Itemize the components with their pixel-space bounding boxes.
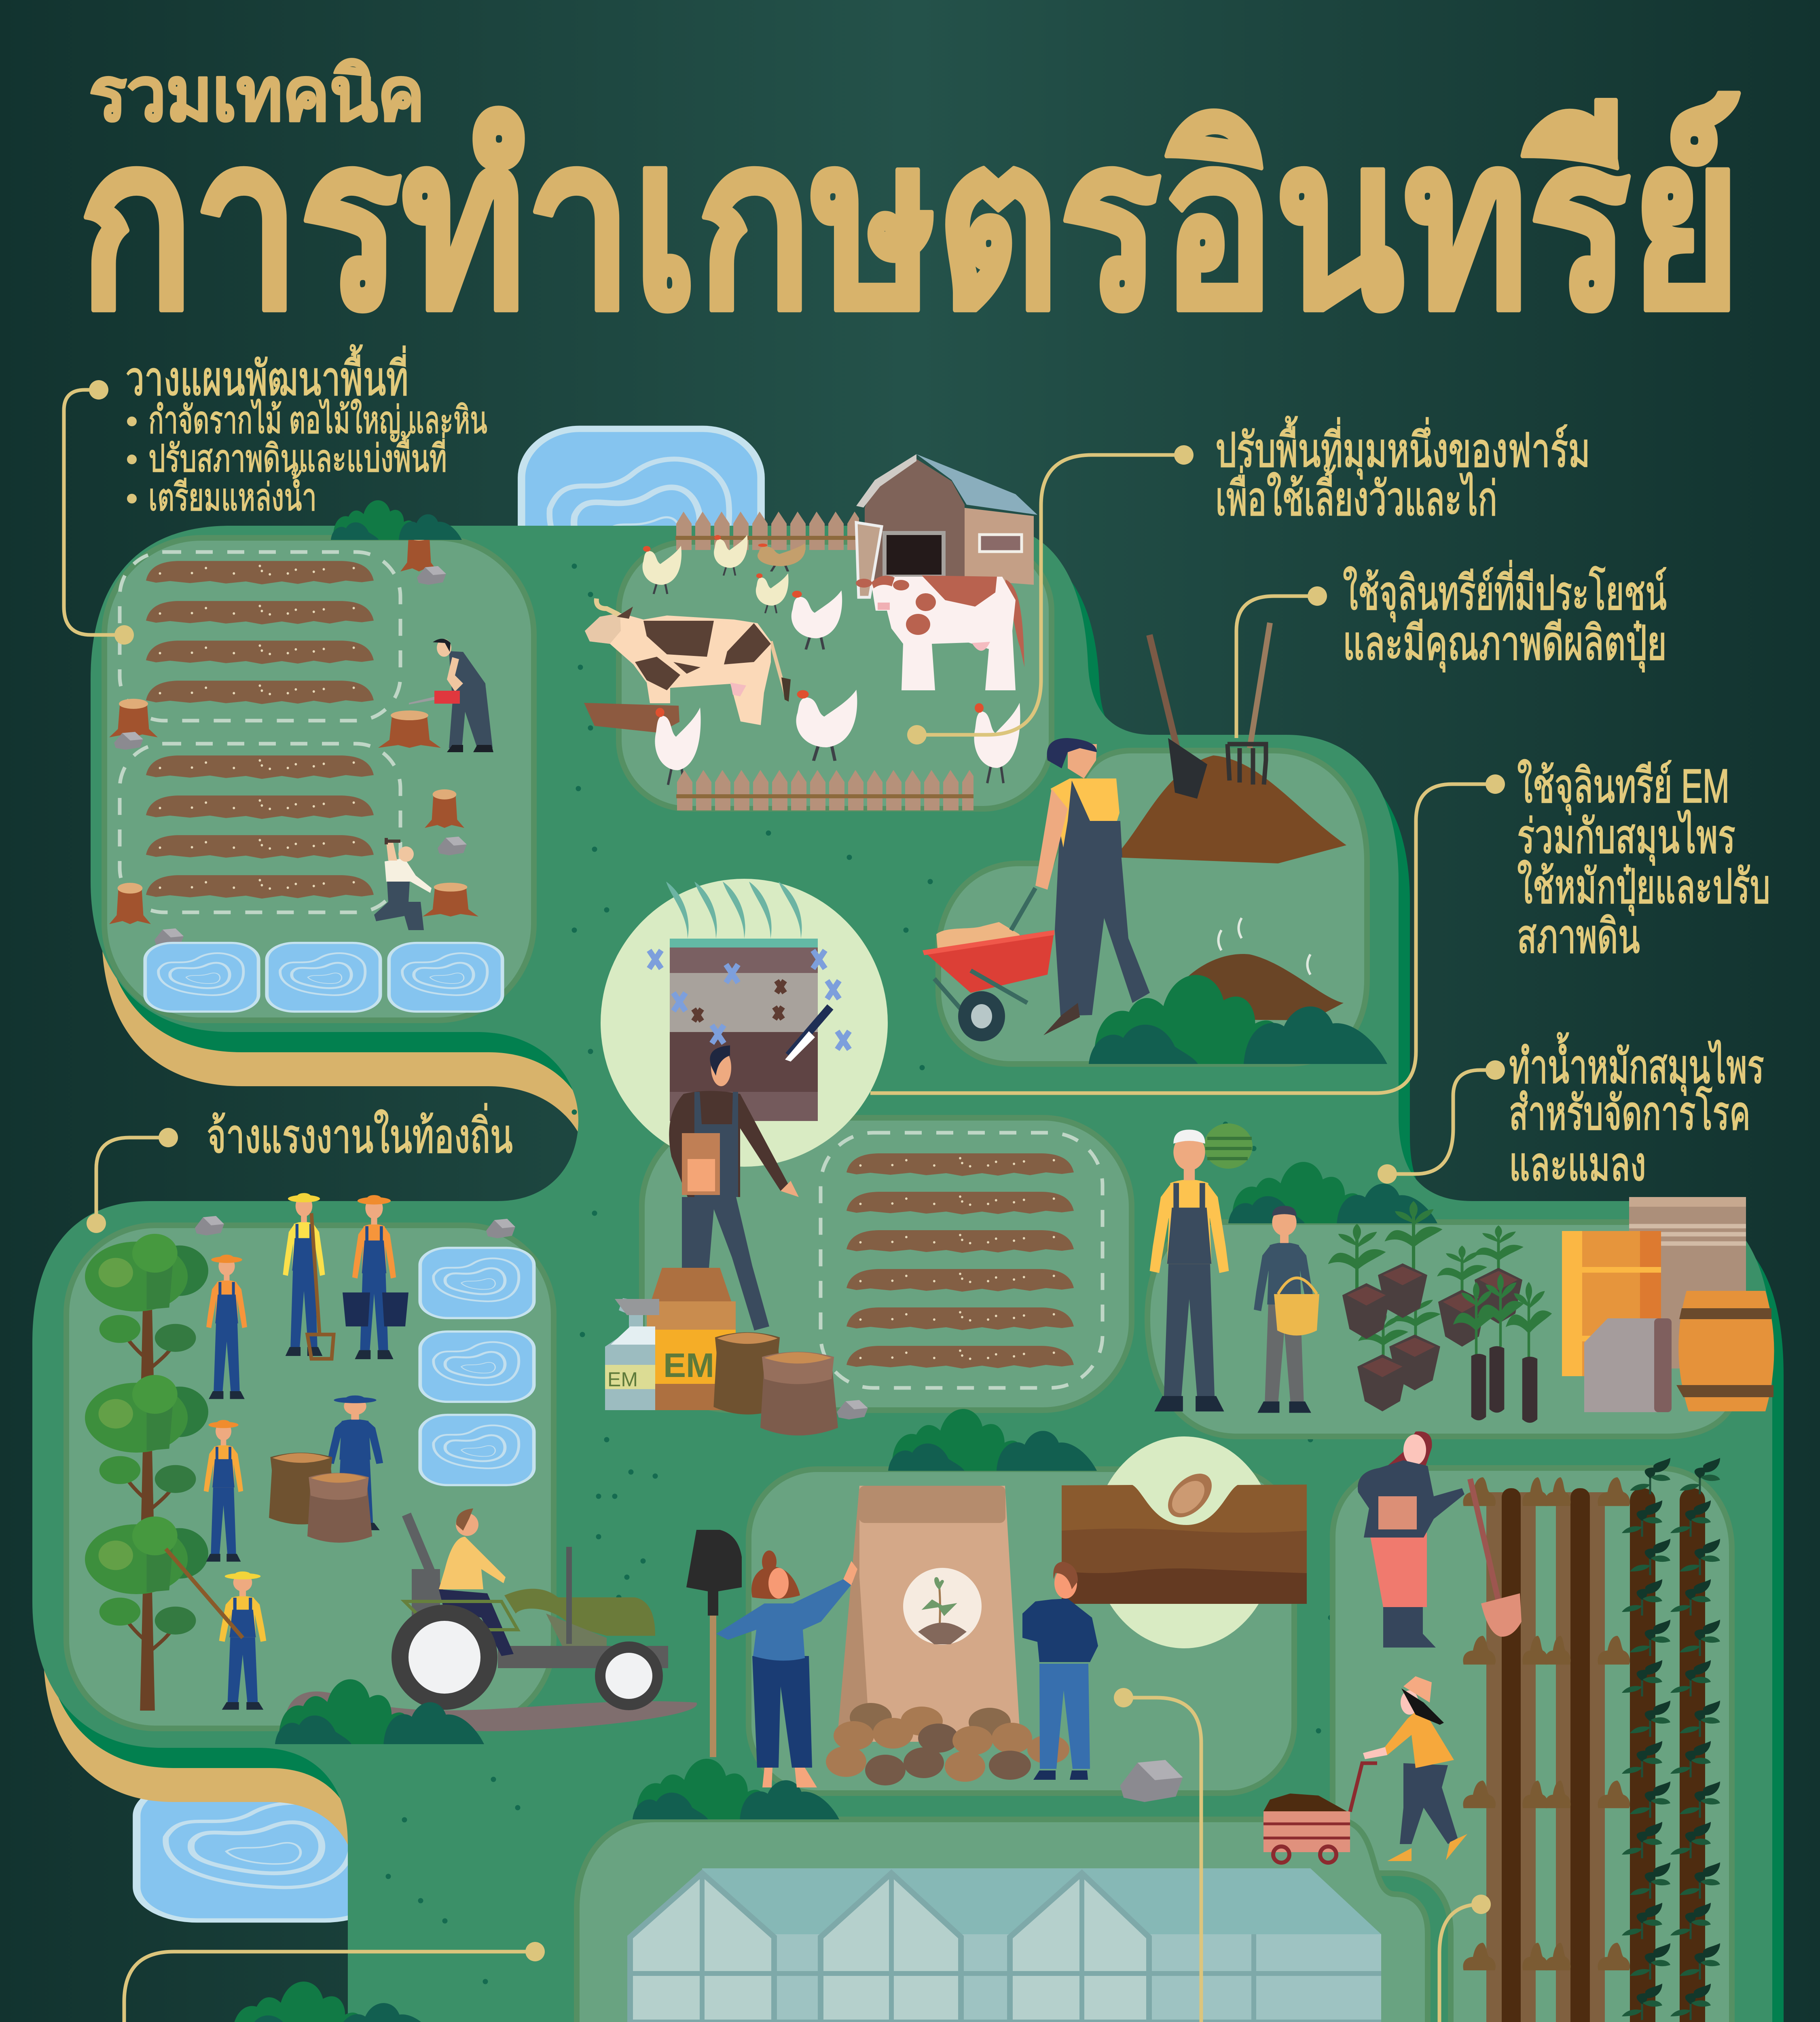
- shovel: [686, 1530, 742, 1757]
- bush: [275, 1679, 484, 1744]
- small ponds: [145, 943, 502, 1011]
- soil beds: land preparation: [146, 561, 374, 899]
- plot: seed selection: [749, 1469, 1294, 1793]
- plot: compost: [938, 751, 1367, 1064]
- soil cross-section circle: [601, 879, 888, 1167]
- worker with chainsaw: [409, 639, 493, 752]
- rocks: [195, 1216, 515, 1238]
- callout: plan the area: ปรับสภาพดินและแบ่งพื้นที่: [148, 431, 447, 480]
- cow: brown and cream: [585, 599, 791, 725]
- chickens: [643, 535, 1020, 785]
- seeds pile: [826, 1703, 1069, 1785]
- callout: raised trenches: [1439, 1895, 1741, 2022]
- plot: greenhouse: [577, 1819, 1428, 2022]
- bush: [888, 1409, 1097, 1471]
- EM box: [647, 1268, 736, 1410]
- EM box: EM: [663, 1346, 714, 1384]
- shovel and fork: [1149, 623, 1270, 799]
- callout: EM microbes: [870, 759, 1770, 1093]
- fence: back: [675, 512, 859, 550]
- soil profile with seed: [1062, 1436, 1307, 1648]
- title: [79, 53, 1741, 357]
- plot: land preparation: [104, 538, 534, 1020]
- plot: seedbed: [642, 1118, 1132, 1410]
- callout: livestock corner: ปรับพื้นที่มุมหนึ่งของฟาร์ม: [1215, 416, 1590, 480]
- greenhouse gables: [630, 1873, 1149, 2022]
- sacks: [269, 1453, 372, 1543]
- greenhouse: [630, 1868, 1381, 2022]
- stumps and rocks: [109, 530, 478, 947]
- barn side wall: [962, 508, 1034, 585]
- seed bag: [837, 1486, 1020, 1742]
- callout: local labour: [87, 1103, 513, 1233]
- plot: livestock: [619, 542, 1052, 809]
- ponds: worker plot: [420, 1248, 534, 1485]
- plot: seedlings: [1147, 1222, 1739, 1436]
- callout: local labour: จ้างแรงงานในท้องถิ่น: [207, 1103, 513, 1163]
- wheelbarrow: [923, 888, 1054, 1041]
- callout: build greenhouse: [124, 1942, 555, 2022]
- callout: plan the area: วางแผนพัฒนาพื้นที่: [125, 345, 408, 406]
- callout: plan the area: [64, 345, 487, 645]
- callout: livestock corner: [907, 416, 1590, 745]
- trees: local workers: [85, 1234, 208, 1711]
- barn roof: [916, 454, 1037, 515]
- dirt track: [284, 1692, 697, 1731]
- cart: [1263, 1794, 1347, 1811]
- greenhouse roof: [702, 1868, 1381, 1934]
- callout: select seed: [1114, 1688, 1747, 2022]
- farm land base: [32, 526, 1784, 2022]
- rock: [1120, 1760, 1183, 1802]
- compost heap: [1114, 755, 1346, 863]
- callout: plan the area: กำจัดรากไม้ ตอไม้ใหญ่ และหิน: [148, 399, 487, 442]
- EM spray bottle: EM: [607, 1368, 638, 1391]
- dashed plot boundaries: [120, 552, 1103, 1388]
- fence: front: [676, 770, 973, 810]
- pond: top: [521, 429, 761, 631]
- greenhouse side wall: [702, 1934, 1381, 2022]
- raised vegetable trenches: [1463, 1477, 1705, 2022]
- callout: herbal ferment: และแมลง: [1509, 1138, 1646, 1191]
- bagged saplings: [1453, 1274, 1552, 1423]
- water trough: [584, 703, 679, 733]
- trench plants: [1622, 1458, 1720, 2022]
- panels: garden plots: [66, 538, 1739, 2022]
- woman with spade: [1358, 1432, 1522, 1648]
- callouts: [64, 345, 1776, 2022]
- soil beds: seedbed: [847, 1153, 1074, 1368]
- heading: small line: รวมเทคนิค: [89, 53, 425, 136]
- workers: [166, 1193, 408, 1710]
- woman with raised hand: [716, 1550, 857, 1787]
- drums and barrels: [1562, 1197, 1774, 1412]
- EM spray bottle: [605, 1298, 659, 1410]
- callout: plan the area: เตรียมแหล่งน้ำ: [148, 470, 317, 518]
- pond: left: [137, 1782, 385, 1920]
- barn front wall: [865, 459, 965, 580]
- callout: beneficial microbes: และมีคุณภาพดีผลิตปุ๋ย: [1343, 617, 1667, 673]
- cow: white and red: [856, 575, 1024, 690]
- bushes: [1089, 975, 1387, 1064]
- bush: [229, 1982, 438, 2022]
- farmer with wheelbarrow: [1035, 738, 1150, 1035]
- barn door: [885, 533, 944, 577]
- boy with basket: [1254, 1206, 1319, 1413]
- callout: EM microbes: สภาพดิน: [1517, 910, 1640, 963]
- small compost pile: [1160, 918, 1344, 1020]
- woman with cart: [1263, 1676, 1467, 1863]
- tractor: [392, 1508, 668, 1710]
- bush: [633, 1759, 839, 1819]
- plot: local workers: [66, 1225, 554, 1728]
- barn: [856, 454, 1037, 597]
- man thinking: [1022, 1562, 1098, 1780]
- farmer with watermelon: [1150, 1123, 1253, 1411]
- potted seedlings: [1328, 1201, 1524, 1411]
- kneeling worker: [374, 838, 432, 930]
- bush: [1228, 1162, 1437, 1223]
- callout: herbal ferment: [1378, 1032, 1764, 1191]
- plot: raised beds: [1333, 1468, 1732, 2022]
- callout: livestock corner: เพื่อใช้เลี้ยงวัวและไก่: [1215, 465, 1497, 526]
- bush: [331, 500, 462, 540]
- farmer with clipboard: [669, 1045, 799, 1330]
- callout: beneficial microbes: [1236, 560, 1667, 738]
- sacks: [713, 1332, 868, 1436]
